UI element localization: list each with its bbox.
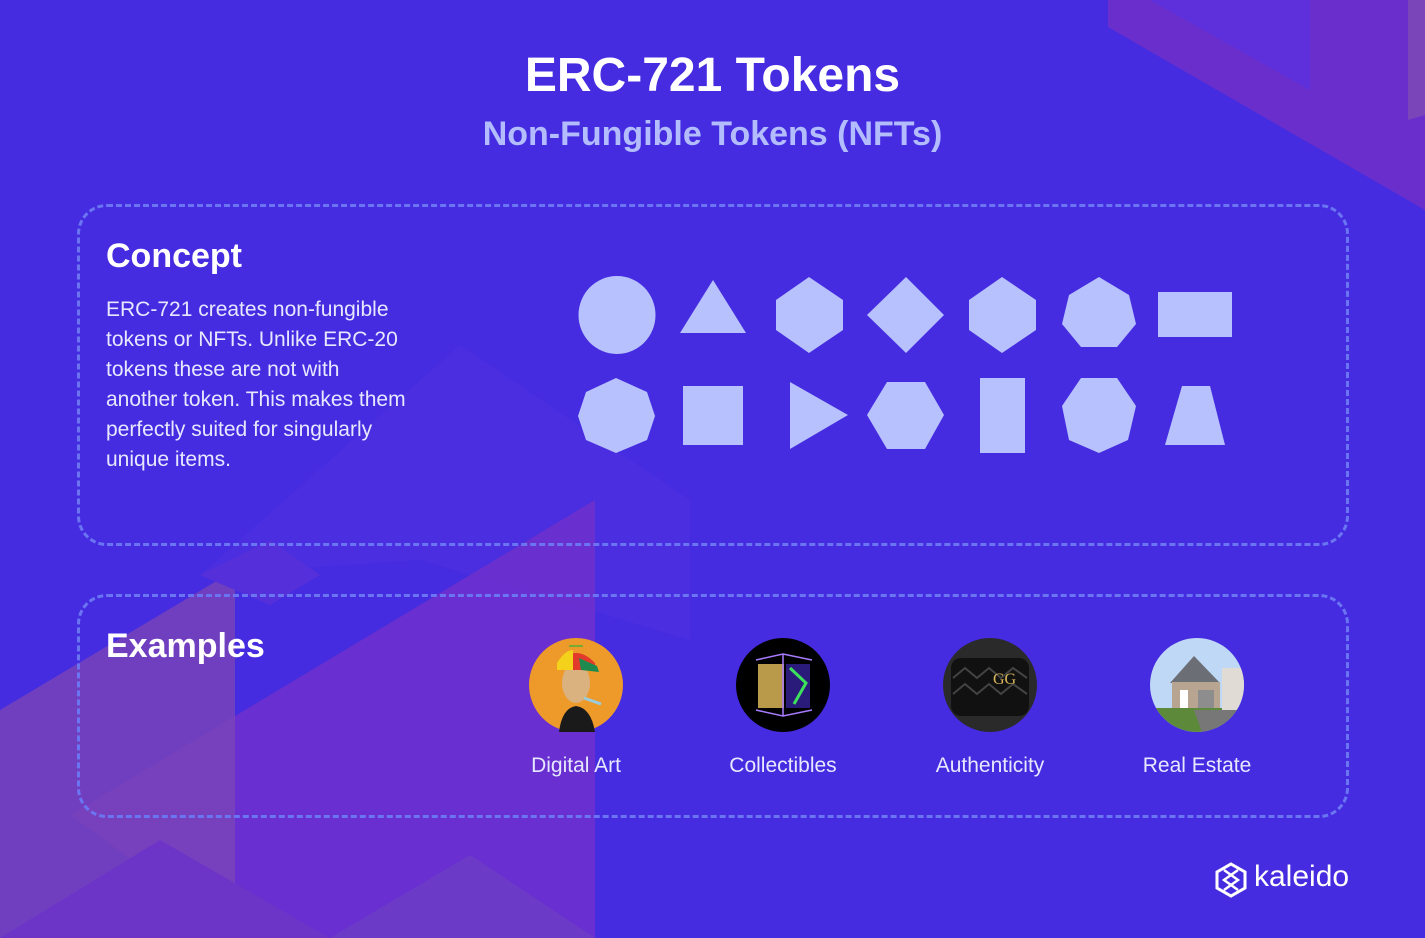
icon: authenticity bag [943,638,1037,732]
concept text: unique items. [106,448,231,471]
concept text: tokens or NFTs. Unlike ERC-20 [106,328,398,351]
panel: concept [77,204,1349,546]
examples heading: Examples [106,627,265,665]
icon: authenticity bag: GG [993,671,1017,688]
concept heading: Concept [106,237,242,275]
label: digital art: Digital Art [531,754,621,777]
concept text: perfectly suited for singularly [106,418,372,441]
label: real estate: Real Estate [1143,754,1251,777]
concept text: another token. This makes them [106,388,406,411]
icon: real estate house [1150,638,1244,732]
concept text: tokens these are not with [106,358,339,381]
icon: collectibles [736,638,830,732]
subtitle: Non-Fungible Tokens (NFTs) [483,115,942,153]
panel: examples [77,594,1349,818]
label: authenticity: Authenticity [936,754,1044,777]
title: ERC-721 Tokens [525,49,900,102]
label: collectibles: Collectibles [729,754,837,777]
icon: digital art ape [529,638,623,732]
logo: kaleido: kaleido [1254,860,1349,893]
icon: kaleido mark [1216,862,1246,898]
concept text [106,298,406,471]
logo: kaleido [1216,860,1349,898]
concept text: ERC-721 creates non-fungible [106,298,388,321]
